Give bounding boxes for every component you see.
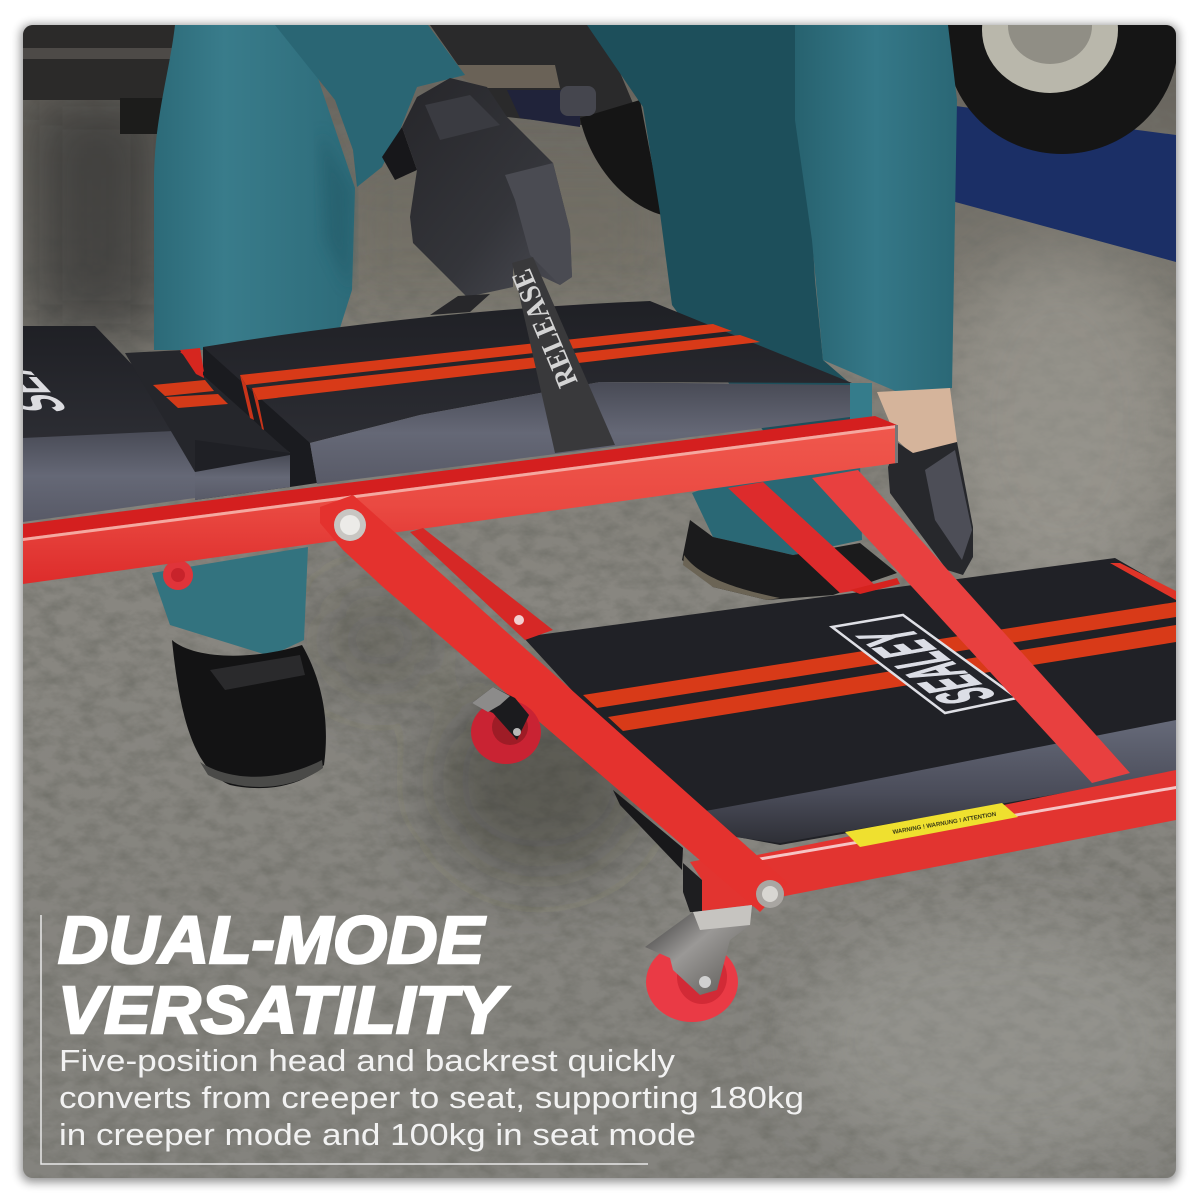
- background vehicle underside: [23, 25, 662, 215]
- front castor: [645, 905, 752, 1022]
- black glove on strap: [382, 78, 572, 297]
- heading: DUAL-MODE: [58, 903, 486, 978]
- caption bracket: [41, 915, 648, 1164]
- head pad: [23, 326, 195, 522]
- warning label: WARNING ! WARNUNG ! ATTENTION: [892, 812, 997, 836]
- frame bolt upper: [334, 509, 366, 541]
- right strut: [812, 470, 1130, 783]
- upper red frame: [23, 348, 898, 590]
- blue platform: [948, 105, 1176, 262]
- right trouser dark leg: [587, 25, 852, 440]
- left lower trouser: [152, 547, 308, 656]
- left arm with pivot plate: [320, 495, 788, 912]
- body text: in creeper mode and 100kg in seat mode: [59, 1117, 696, 1152]
- warning label: [845, 803, 1018, 847]
- neck pad: [125, 348, 290, 500]
- strap label: RELEASE: [505, 264, 584, 392]
- SEALEY logo: [832, 615, 1017, 713]
- rail end: [683, 855, 762, 913]
- truck tyre: [948, 25, 1176, 154]
- body text: Five-position head and backrest quickly: [59, 1043, 676, 1078]
- right trouser front leg: [795, 25, 957, 393]
- seat frame rail: [757, 770, 1176, 898]
- seat base cushion: [523, 558, 1176, 845]
- rear strut: [728, 482, 877, 593]
- right boot: [682, 520, 897, 600]
- lower glove: [888, 442, 973, 575]
- right lower trouser: [692, 462, 862, 555]
- back castor: [471, 687, 541, 764]
- seat under-side: [613, 790, 683, 870]
- frame bolt lower: [756, 880, 784, 908]
- second rail behind arm: [410, 528, 553, 640]
- release strap: [430, 257, 615, 453]
- heading: VERSATILITY: [58, 973, 509, 1048]
- body text: converts from creeper to seat, supporting 180kg: [59, 1080, 804, 1115]
- sleeve: [275, 25, 465, 187]
- arm skin: [877, 388, 957, 455]
- heading: [58, 903, 509, 1048]
- shadow fold: [324, 160, 358, 282]
- photo panel: creeper seat in workshop: SEALEY: [840, 624, 1015, 709]
- left boot: [172, 640, 326, 788]
- back pad: [203, 301, 852, 487]
- left trouser leg: [154, 25, 355, 350]
- body text: [59, 1043, 804, 1152]
